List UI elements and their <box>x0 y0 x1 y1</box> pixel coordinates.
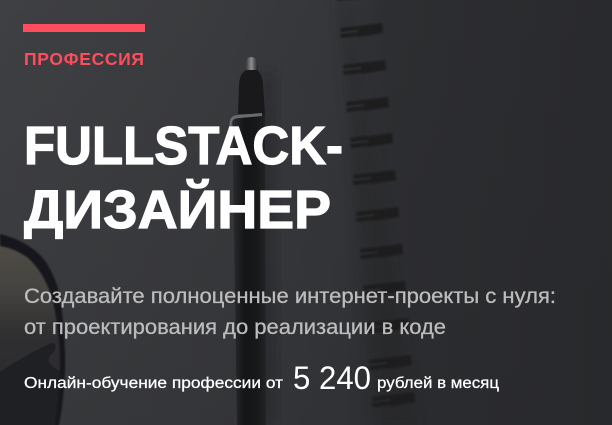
pen shadow <box>262 72 274 425</box>
title line 2: ДИЗАЙНЕР <box>24 179 331 240</box>
price unit: рублей в месяц <box>377 375 499 392</box>
title <box>24 116 343 240</box>
price intro: Онлайн-обучение профессии от <box>24 375 283 392</box>
accent bar <box>23 24 145 32</box>
pen <box>229 57 266 425</box>
price line <box>24 360 499 396</box>
glasses frame <box>0 234 65 425</box>
notebook spiral rings <box>337 0 415 407</box>
title line 1: FULLSTACK- <box>24 116 343 176</box>
description line 1: Создавайте полноценные интернет-проекты с нуля: <box>24 285 556 308</box>
notebook edge shadow <box>338 0 416 425</box>
description <box>24 285 556 339</box>
description line 2: от проектирования до реализации в коде <box>24 316 446 339</box>
price value: 5 240 <box>293 360 371 396</box>
glasses <box>0 234 65 425</box>
glasses lens <box>0 240 63 425</box>
glasses inner band <box>0 343 62 425</box>
label: profession: ПРОФЕССИЯ <box>24 49 144 69</box>
